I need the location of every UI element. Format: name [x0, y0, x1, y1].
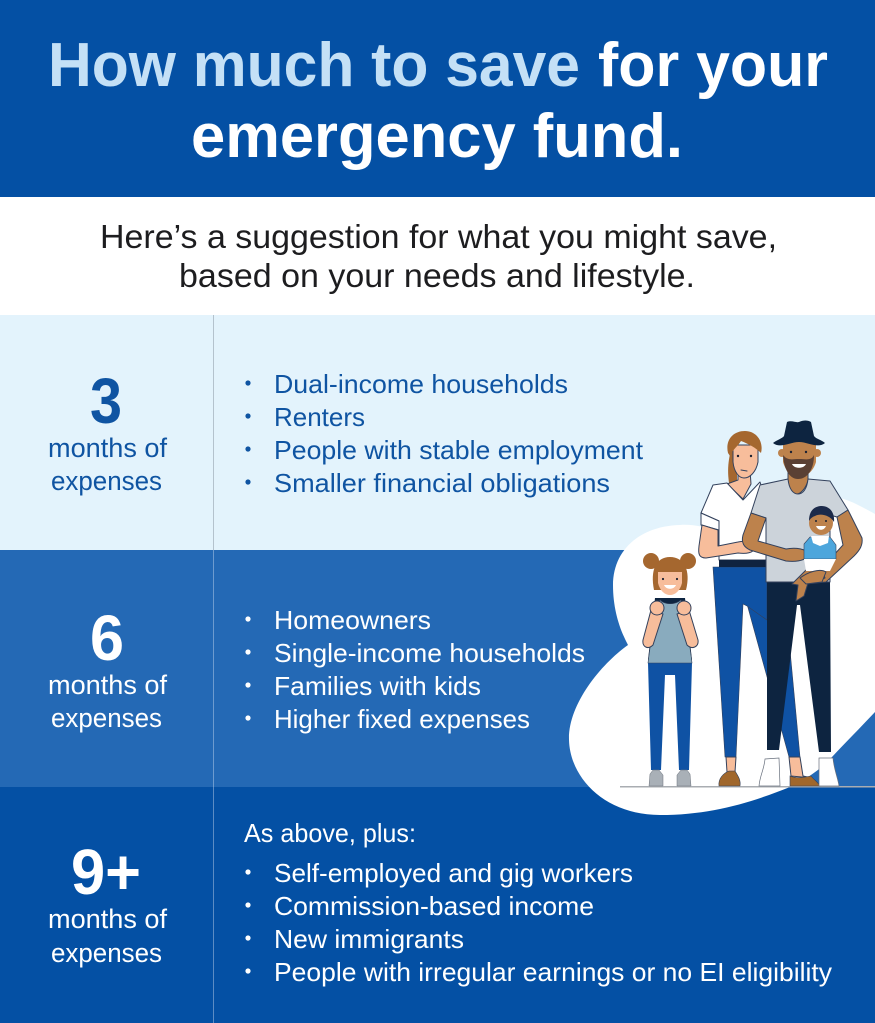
baby diaper — [804, 559, 836, 571]
panel: 9+ months — [0, 787, 875, 1023]
baby body — [804, 537, 836, 559]
6 months list: Homeowners — [274, 605, 431, 635]
title — [48, 31, 828, 171]
pony tail — [728, 450, 737, 483]
man — [742, 420, 862, 786]
white blob — [569, 498, 875, 815]
9+ months label — [48, 836, 167, 968]
girl shoes — [649, 770, 663, 786]
6 months label: expenses — [51, 703, 162, 733]
header banner — [0, 0, 875, 197]
3 months list: People with stable employment — [274, 435, 644, 465]
woman near leg — [713, 567, 767, 757]
girl — [643, 553, 698, 786]
9+ months label: 9+ — [71, 836, 141, 908]
3 months label: 3 — [90, 365, 122, 437]
illustration: family on white blob — [569, 420, 875, 815]
woman ankles and shoes — [726, 757, 736, 772]
woman neck — [727, 470, 751, 499]
girl legs — [648, 663, 692, 770]
9+ months list: As above, plus: — [244, 818, 416, 848]
woman head — [733, 445, 758, 478]
woman shirt — [701, 482, 767, 560]
baby legs — [792, 566, 825, 601]
girl backpack — [648, 598, 692, 660]
man trousers — [767, 582, 831, 752]
man head — [778, 449, 786, 457]
woman belt — [719, 560, 767, 567]
title: emergency fund. — [191, 102, 683, 171]
title: for your — [598, 31, 828, 100]
girl arms — [643, 610, 663, 647]
baby collar — [811, 536, 829, 546]
3 months label: months of — [48, 433, 167, 463]
9+ months list: New immigrants — [274, 924, 464, 954]
woman far leg — [747, 570, 800, 757]
girl face — [658, 572, 682, 595]
6 months list: Higher fixed expenses — [274, 704, 530, 734]
3 months label — [48, 365, 167, 496]
9+ months label: months of — [48, 904, 167, 934]
9+ months list — [244, 818, 832, 987]
6 months label: months of — [48, 670, 167, 700]
girl top — [648, 600, 692, 663]
panel: 6 months — [0, 550, 875, 787]
man right arm — [800, 510, 862, 584]
man shirt — [751, 479, 848, 582]
intro text: Here’s a suggestion for what you might save, — [100, 218, 777, 255]
9+ months list: Self-employed and gig workers — [274, 858, 633, 888]
intro text — [0, 197, 875, 315]
9+ months label: expenses — [51, 938, 162, 968]
6 months list: Families with kids — [274, 671, 481, 701]
9+ months list: People with irregular earnings or no EI eligibility — [274, 957, 832, 987]
6 months label: 6 — [90, 602, 124, 674]
6 months list: Single-income households — [274, 638, 585, 668]
3 months list: Dual-income households — [274, 369, 568, 399]
title: How much to save — [48, 31, 580, 100]
man beard — [783, 455, 814, 479]
3 months list: Smaller financial obligations — [274, 468, 610, 498]
3 months list: Renters — [274, 402, 365, 432]
6 months label — [48, 602, 167, 733]
baby head — [809, 511, 833, 535]
3 months list — [245, 369, 644, 498]
girl hair — [643, 553, 659, 569]
9+ months list: Commission-based income — [274, 891, 594, 921]
man shoes — [759, 758, 780, 786]
woman hair — [727, 431, 762, 456]
panel: 3 months — [0, 315, 875, 550]
man hat — [773, 420, 825, 445]
intro text: based on your needs and lifestyle. — [179, 257, 695, 294]
6 months list — [245, 605, 585, 734]
woman — [699, 431, 820, 786]
ground line — [620, 786, 875, 788]
baby — [792, 506, 836, 601]
man left arm — [742, 513, 810, 561]
3 months label: expenses — [51, 466, 162, 496]
man neck — [788, 468, 808, 494]
man hand on baby — [800, 570, 826, 584]
woman arm — [699, 525, 754, 558]
